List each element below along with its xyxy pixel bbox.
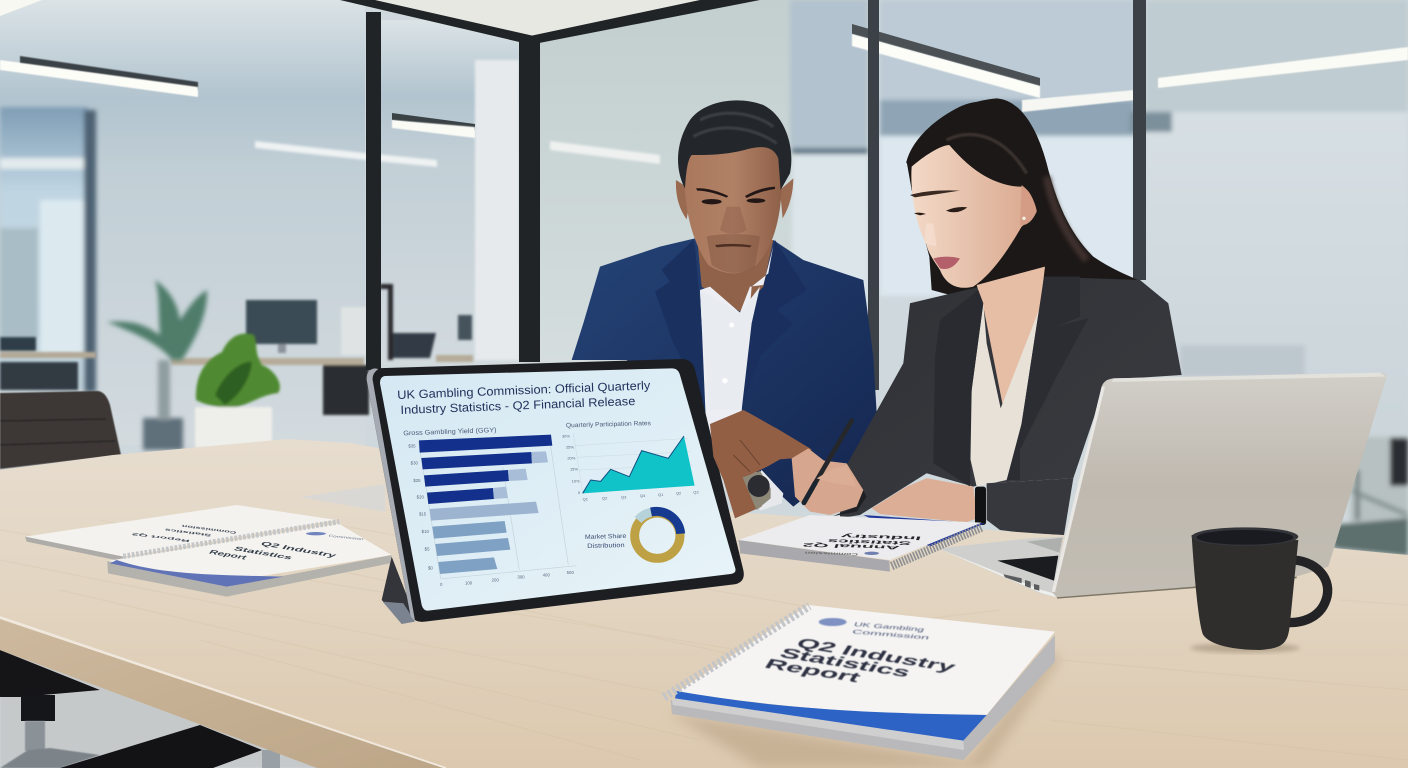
ceiling — [352, 0, 760, 38]
bar chart: gross gambling yield: $30 — [411, 460, 418, 465]
tablet — [367, 359, 744, 624]
centre notebook: Statistics — [827, 538, 912, 546]
area chart: quarterly participation rates: Q1 — [583, 497, 589, 502]
man's neck — [697, 240, 773, 312]
bar chart: gross gambling yield: $25 — [413, 478, 421, 483]
bar chart: gross gambling yield: 400 — [543, 572, 550, 577]
region right of man — [790, 0, 1408, 452]
area chart: quarterly participation rates: Quarterly Participation Rates — [566, 420, 651, 429]
front report: Statistics — [232, 545, 294, 561]
table front edge — [0, 617, 446, 768]
report title: Report — [762, 655, 864, 685]
area chart: quarterly participation rates: Q2 — [676, 490, 682, 495]
bar chart: gross gambling yield: $0 — [428, 565, 433, 570]
woman's features — [910, 190, 1026, 269]
laptop — [938, 373, 1386, 599]
tablet body — [367, 359, 744, 622]
woman's forearm sleeve — [987, 478, 1073, 535]
area chart: quarterly participation rates: Q2 — [602, 496, 608, 501]
window at left — [0, 107, 96, 392]
meeting table — [0, 439, 1408, 768]
donut chart: market share — [635, 511, 681, 558]
plants — [107, 280, 280, 450]
area chart: quarterly participation rates: 25% — [566, 444, 574, 449]
shadow under front report — [668, 650, 1060, 768]
woman's holding hand — [792, 448, 863, 515]
area chart: quarterly participation rates: 30% — [562, 433, 570, 438]
woman's hair back — [907, 98, 1142, 295]
area chart: quarterly participation rates: 10% — [572, 479, 580, 484]
back report — [25, 505, 337, 562]
bar chart: gross gambling yield: 300 — [517, 575, 525, 580]
area chart: quarterly participation rates: Q3 — [621, 495, 627, 500]
white column — [475, 60, 519, 360]
woman's right hand — [872, 478, 977, 522]
black coffee mug — [1192, 527, 1328, 650]
glass frame posts — [340, 0, 1146, 390]
tablet screen — [380, 368, 736, 611]
area chart: quarterly participation rates: Q4 — [640, 493, 646, 498]
bar chart: gross gambling yield: 100 — [465, 580, 473, 585]
man's lapels — [655, 240, 703, 400]
back report: Commission — [181, 524, 237, 534]
tablet heading: Industry Statistics - Q2 Financial Release — [400, 394, 636, 417]
table wood grain — [0, 510, 1408, 760]
tablet stand — [382, 557, 415, 623]
area chart: quarterly participation rates: Q1 — [658, 492, 664, 497]
report pages — [671, 635, 1055, 760]
tablet heading: UK Gambling Commission: Official Quarterly — [397, 378, 651, 402]
bar chart: gross gambling yield: $20 — [417, 495, 424, 500]
donut label — [585, 533, 627, 550]
front report: Report — [207, 548, 249, 561]
area chart: quarterly participation rates: 20% — [567, 456, 576, 461]
man's suit — [572, 238, 878, 507]
report title — [762, 635, 961, 685]
laptop behind tablet — [300, 484, 385, 512]
report logo: Commission — [851, 629, 930, 641]
background chair right — [1333, 437, 1408, 556]
report title: Statistics — [777, 645, 914, 680]
man's watch — [743, 471, 771, 510]
donut label: Distribution — [587, 542, 625, 550]
person: man — [572, 100, 878, 507]
bar chart: gross gambling yield: 500 — [567, 570, 574, 575]
bar chart: gross gambling yield — [403, 427, 577, 587]
woman's watch — [975, 487, 986, 525]
report title: Q2 Industry — [793, 635, 961, 675]
front report — [107, 523, 392, 597]
back report: Report Q2 — [131, 531, 190, 543]
back report: Statistics — [164, 527, 212, 537]
person: woman — [840, 98, 1182, 535]
woman's blouse — [968, 303, 1039, 487]
area chart: quarterly participation rates: Q3 — [693, 490, 699, 495]
bar chart: gross gambling yield: 0 — [440, 582, 443, 587]
background monitors and desks — [0, 284, 473, 415]
report logo: UK Gambling — [853, 621, 925, 633]
woman's lapels — [933, 290, 983, 487]
bar chart: gross gambling yield: $10 — [422, 529, 429, 534]
centre notebook: Commission — [804, 550, 859, 556]
front report: Commission — [328, 534, 365, 541]
woman's thumb — [817, 465, 857, 487]
report cover — [670, 605, 1055, 715]
tablet heading — [397, 378, 651, 417]
donut label: Market Share — [585, 533, 627, 541]
bar chart: gross gambling yield: 200 — [492, 578, 499, 583]
bar chart: gross gambling yield: Gross Gambling Yield (GGY) — [403, 427, 497, 437]
bar chart: gross gambling yield: $35 — [408, 444, 416, 449]
man's cuff — [757, 470, 783, 511]
laptop lid — [1052, 373, 1386, 597]
area chart: quarterly participation rates — [562, 420, 699, 502]
report: Q2 Industry Statistics Report — [664, 605, 1055, 760]
man's ears — [676, 178, 793, 219]
woman's hair front — [906, 101, 1047, 210]
woman's ear — [1020, 185, 1037, 225]
man's features — [696, 187, 775, 247]
hands and pen — [710, 410, 867, 518]
floor and foreground chair — [0, 640, 330, 768]
pen — [815, 421, 852, 483]
laptop keyboard — [997, 556, 1058, 581]
bar chart: gross gambling yield: $5 — [425, 547, 430, 552]
woman's face — [911, 145, 1033, 288]
woman's blazer — [840, 277, 1182, 518]
bar chart: gross gambling yield: $15 — [419, 512, 427, 517]
laptop ports — [1003, 574, 1039, 591]
man's hair — [678, 100, 791, 190]
area chart: quarterly participation rates: 0 — [578, 490, 581, 495]
woman's cuff — [833, 478, 867, 516]
laptop base — [938, 537, 1063, 597]
man's arm and hand — [710, 410, 812, 518]
spiral binding — [123, 522, 339, 556]
report pile: left — [25, 505, 392, 597]
woman's neck and chest — [977, 267, 1045, 408]
spiral binding — [664, 606, 809, 697]
man's shirt — [694, 245, 773, 440]
centre notebook: Industry — [838, 533, 922, 541]
man's face — [685, 137, 782, 273]
centre notebook — [738, 515, 985, 572]
ceiling lights — [0, 0, 1408, 167]
front report: Q2 Industry — [259, 540, 339, 559]
shadow under mug — [1190, 643, 1300, 653]
area chart: quarterly participation rates: 15% — [570, 467, 578, 472]
centre notebook: Annual Q2 — [802, 542, 900, 551]
report logo — [819, 618, 930, 641]
chair back at left — [0, 391, 121, 469]
